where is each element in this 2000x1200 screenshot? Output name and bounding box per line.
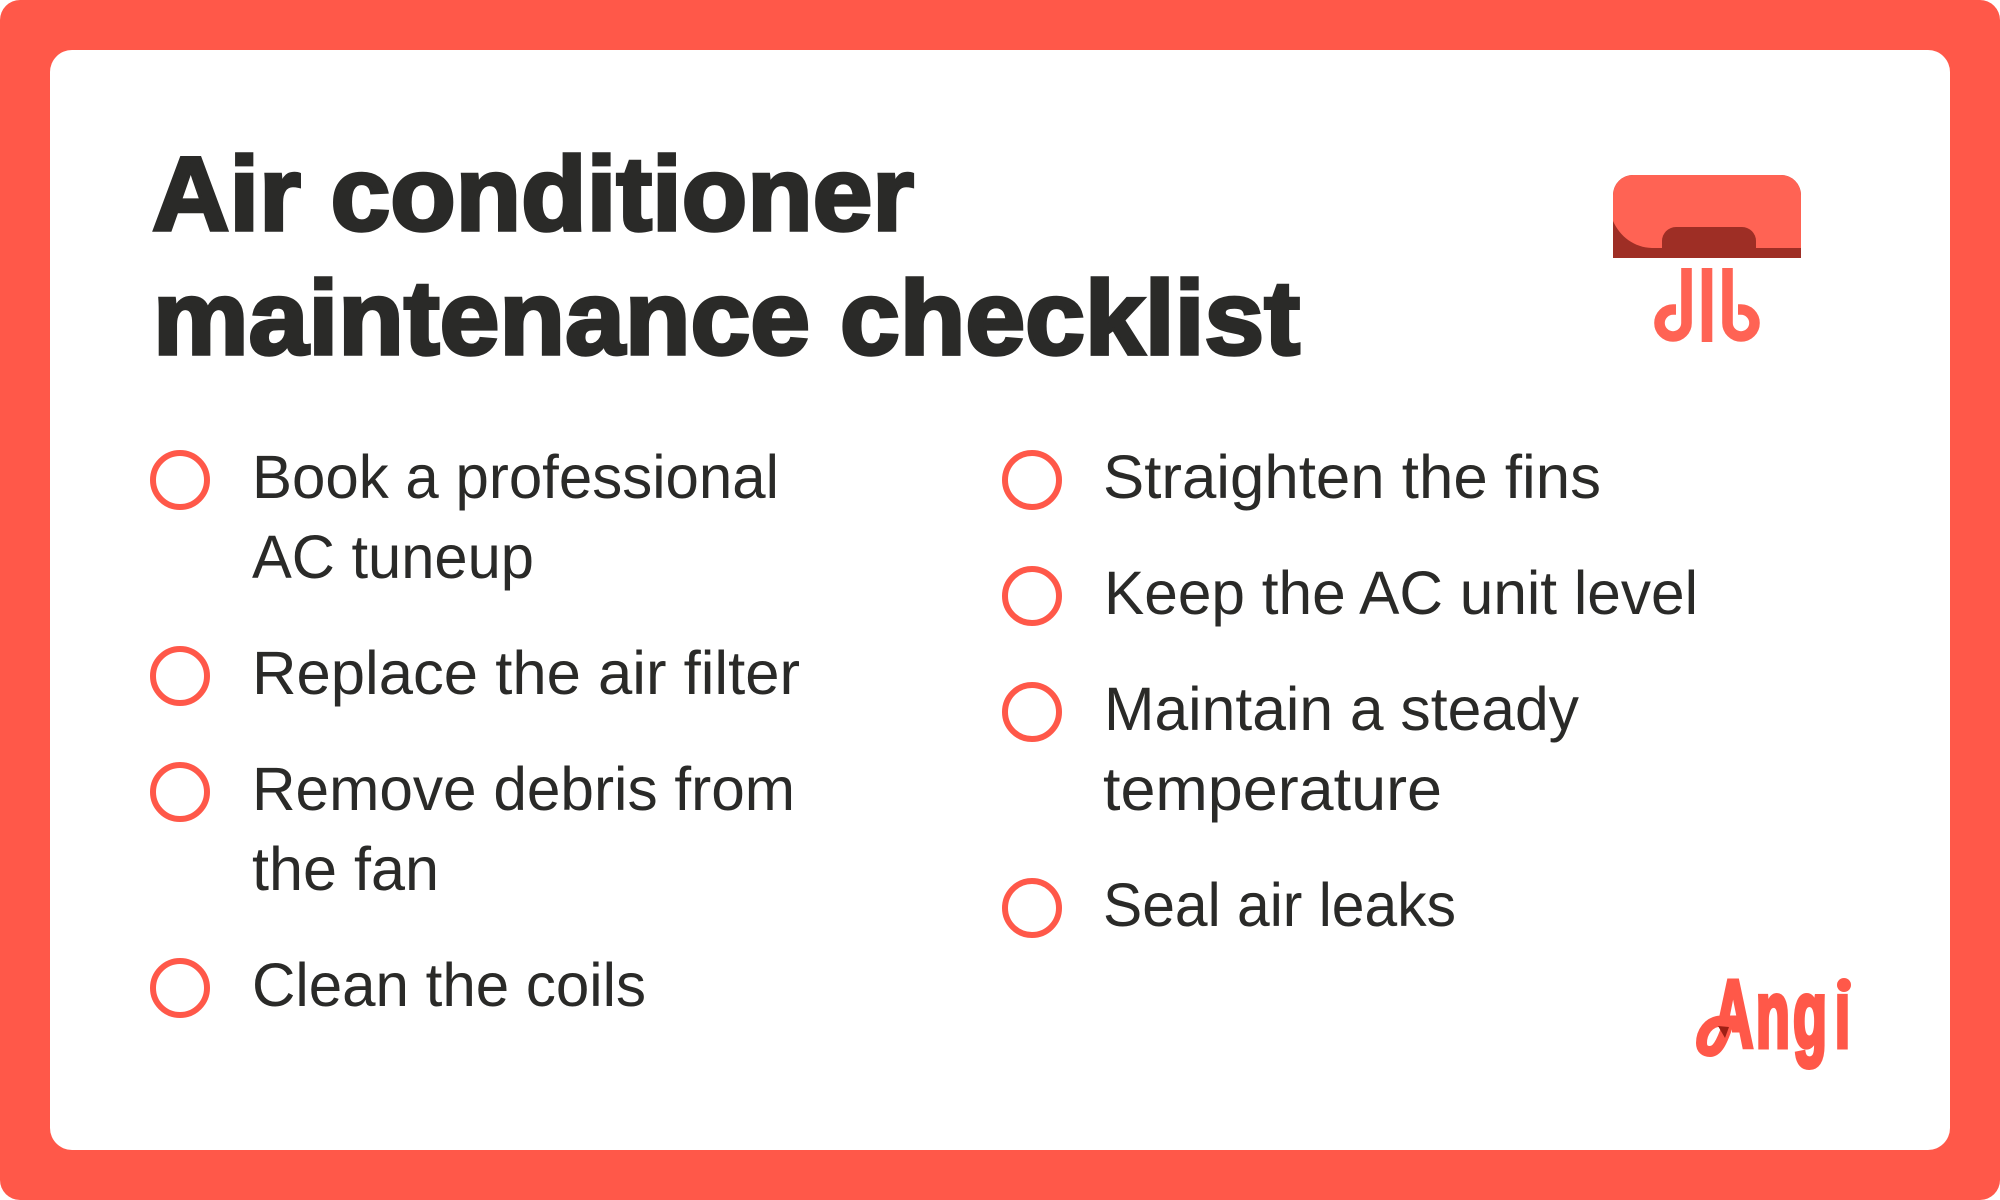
item: Remove debris from the fan: the fan	[252, 835, 439, 903]
title: maintenance checklist	[153, 260, 1300, 377]
item: Remove debris from the fan	[153, 755, 795, 903]
item: Maintain a steady temperature: Maintain a steady	[1104, 675, 1579, 743]
item: Replace the air filter: Replace the air filter	[252, 639, 800, 707]
item: Remove debris from the fan: Remove debris from	[252, 755, 795, 823]
item: Keep the AC unit level: Keep the AC unit level	[1104, 559, 1698, 627]
item: Clean the coils: Clean the coils	[252, 951, 646, 1019]
checklist: left column	[153, 443, 800, 1019]
icon: air conditioner	[1613, 175, 1801, 342]
logo: Angi: Angi	[1713, 960, 1850, 1068]
checklist: right column	[1005, 443, 1698, 939]
item: Book a professional AC tuneup: Book a professional	[252, 443, 779, 511]
item: Maintain a steady temperature: temperature	[1103, 755, 1442, 823]
item: Book a professional AC tuneup	[153, 443, 779, 591]
item: Maintain a steady temperature	[1005, 675, 1579, 823]
title: Air conditioner	[152, 136, 914, 253]
item: Book a professional AC tuneup: AC tuneup	[252, 523, 534, 591]
title	[152, 136, 1300, 377]
item: Seal air leaks: Seal air leaks	[1103, 871, 1456, 939]
item: Straighten the fins: Straighten the fins	[1103, 443, 1601, 511]
